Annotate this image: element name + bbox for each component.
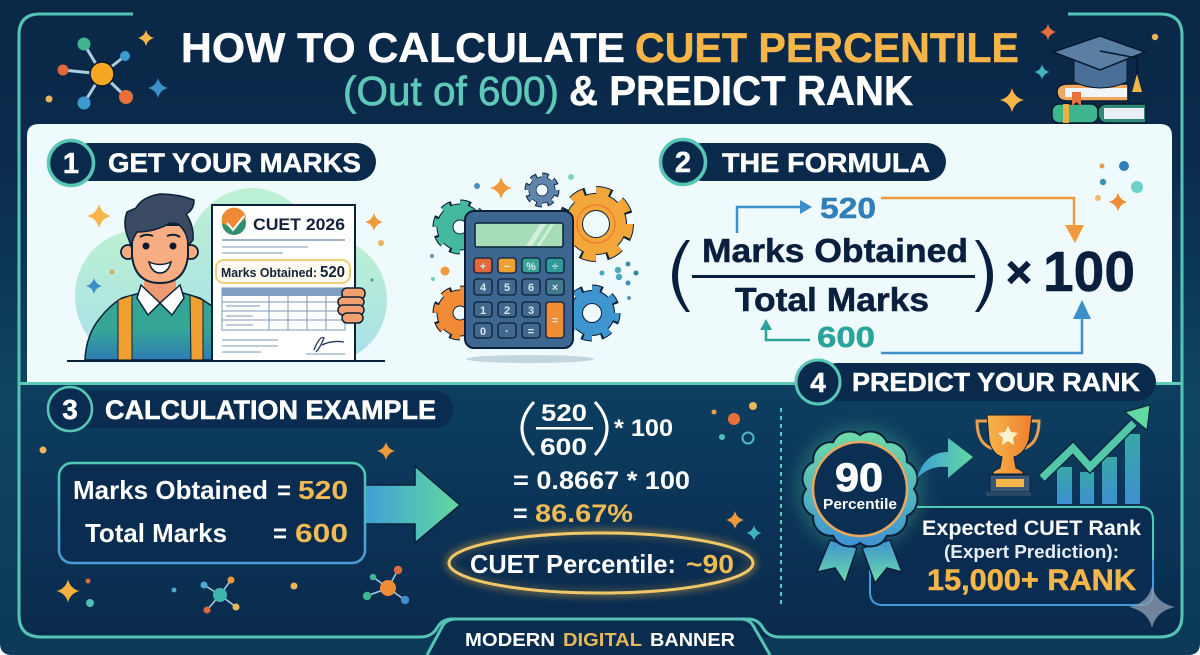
arrow: marks to 520 [737,200,812,233]
key labels: 1 [480,305,486,317]
title [181,24,1019,114]
rosette [803,432,917,546]
rank result box: (Expert Prediction): [944,542,1119,562]
heading: step 2 [660,140,946,184]
title: CUET PERCENTILE [635,24,1019,71]
step: percentage: = [513,500,528,528]
heading: step 2: THE FORMULA [722,148,930,178]
calculator screen [475,223,563,247]
percentile oval [449,533,753,593]
heading: step 4 [796,360,1156,404]
key labels: 2 [504,305,510,317]
ground line [67,360,385,362]
heading: step 1: 1 [63,148,79,180]
key labels: 6 [528,282,534,294]
footer label [427,619,770,655]
illustration: calculator and gears [430,174,638,363]
arrow: curved to trophy [917,438,973,478]
rank result box [870,507,1153,605]
given values box: Marks Obtained [73,475,268,505]
footer label: MODERN [465,630,555,650]
percentile oval: ~90 [686,549,734,579]
given values box: = [277,475,291,505]
heading: step 4: 4 [810,367,826,398]
heading: step 1 [48,140,376,186]
sparkles [86,204,384,294]
key labels: % [526,261,536,273]
calculator decoration [430,174,638,300]
key labels: ÷ [552,261,558,273]
score card: 520 [320,264,345,281]
heading: step 1: GET YOUR MARKS [108,148,361,178]
fraction: 520 [541,400,587,427]
badge: 90 percentile: Percentile [823,496,897,513]
icon: graduation cap and books [1052,36,1146,123]
title: & PREDICT RANK [569,67,913,114]
title: HOW TO CALCULATE [181,24,625,71]
heading: step 3: 3 [62,394,78,425]
badge: 90 percentile: 90 [835,456,883,500]
chart: rising bars [1042,405,1150,504]
given values box: 520 [298,475,348,505]
multiplier: × [1006,248,1032,297]
key labels [480,261,558,338]
arrow: 600 to total [760,319,810,340]
arrow: gradient right [363,466,460,543]
formula decoration [1095,161,1143,212]
dotted divider [780,408,782,606]
key labels: − [504,261,510,273]
formula fraction: Marks Obtained [702,232,968,269]
icon: trophy [977,415,1039,496]
heading: step 4: PREDICT YOUR RANK [852,367,1140,397]
icon: header sparkles right [1000,24,1158,112]
lower section background [18,383,1182,637]
calculation decoration [712,402,762,540]
percentile oval: CUET Percentile: [470,549,676,579]
given values box: Total Marks [85,518,227,548]
key labels: + [480,261,486,273]
key labels: · [505,326,509,338]
key labels: × [552,282,558,294]
gears [437,176,628,337]
given values box: = [273,518,287,548]
arrow: 600 to 100 [881,300,1091,353]
badge: 90 percentile [798,427,922,583]
section divider [18,382,1182,385]
icon: header sparkles left [138,30,168,98]
key labels: = [528,326,534,338]
footer label: BANNER [650,630,735,650]
key labels: 5 [504,282,510,294]
icon: molecule [46,38,133,110]
hand [338,288,365,323]
lower left decoration [40,442,409,614]
key labels: 0 [480,326,486,338]
multiplier: 100 [1043,240,1135,304]
heading: step 2: 2 [675,147,691,179]
fraction [522,400,673,461]
value 600: 600 [817,322,875,354]
fraction: * 100 [614,415,673,442]
key labels: 3 [528,305,534,317]
white content panel [27,124,1172,383]
given values box: 600 [295,518,348,548]
calculation steps [449,400,753,593]
score card [212,205,355,361]
key labels: = [552,315,558,327]
title: (Out of 600) [343,68,559,114]
score card: CUET 2026 [253,215,345,234]
heading: step 3 [48,387,453,431]
value 520: 520 [820,193,876,225]
score card: Marks Obtained: [221,265,317,280]
formula [672,161,1143,354]
step: decimal: = 0.8667 * 100 [513,467,690,495]
multiplier [1006,240,1135,304]
given values box [59,463,365,563]
formula fraction: Total Marks [735,281,929,318]
blob backdrop [75,188,387,361]
key labels: 4 [480,282,487,294]
illustration: student holding score card [67,188,387,362]
rank result box: Expected CUET Rank [922,517,1141,540]
icon: gray sparkle [1129,586,1175,628]
footer label: DIGITAL [563,630,642,650]
fraction: 600 [540,434,587,461]
calculator keys [474,258,564,338]
heading: step 3: CALCULATION EXAMPLE [105,395,436,425]
ribbons [817,540,902,583]
arrow: 520 to 100 [881,198,1084,243]
student [85,194,212,360]
formula fraction [672,232,993,318]
rank result box: 15,000+ RANK [927,564,1136,597]
step: percentage: 86.67% [535,500,633,528]
calculator body [465,211,573,348]
